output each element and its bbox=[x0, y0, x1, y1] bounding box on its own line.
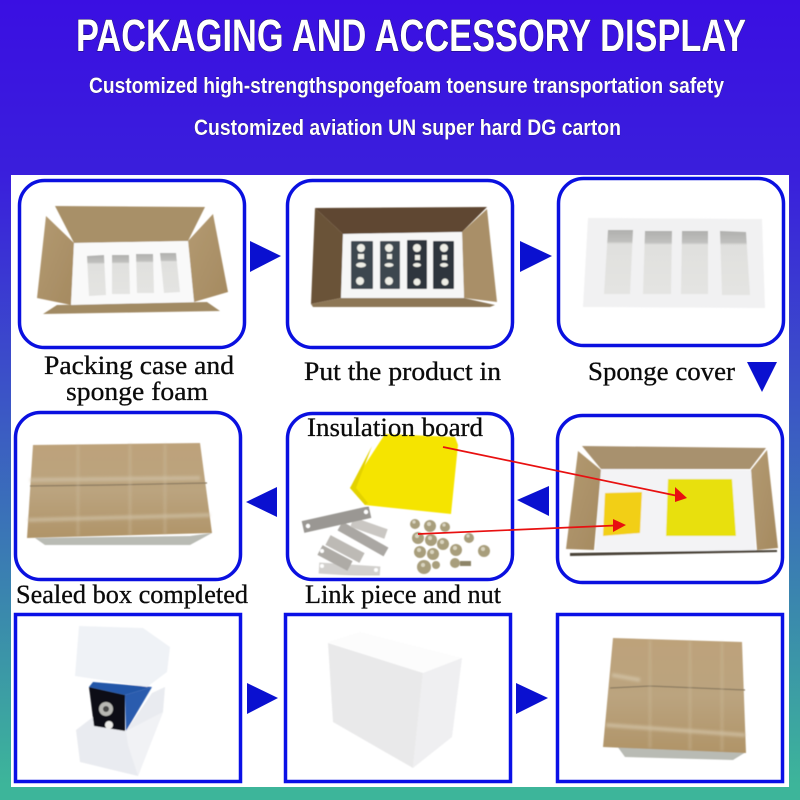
white content panel bbox=[11, 175, 789, 787]
panel: put the product in bbox=[288, 180, 512, 348]
arrow: red pointer to small board bbox=[418, 519, 626, 534]
arrow: right 1 bbox=[250, 241, 281, 272]
photo: taped carton bbox=[603, 638, 746, 760]
photo: insulation boards bbox=[350, 434, 458, 514]
panel: carton with boards bbox=[558, 416, 782, 582]
subtitle line 1: Customized high-strengthspongefoam toensure transportation safety bbox=[89, 73, 725, 98]
photo: metal link pieces bbox=[303, 510, 386, 572]
photo: carton with insulation boards bbox=[566, 446, 778, 556]
caption: packing case and sponge foam: Packing case and bbox=[44, 351, 234, 380]
panel: sealed box completed bbox=[16, 412, 240, 580]
caption: put the product in: Put the product in bbox=[304, 357, 501, 386]
arrow: red pointer to large board bbox=[443, 447, 687, 502]
photo: foam cover bbox=[583, 218, 765, 308]
photo: screws and nuts bbox=[410, 519, 490, 574]
subtitle line 2: Customized aviation UN super hard DG carton bbox=[194, 115, 621, 140]
panel: packing case and sponge foam bbox=[20, 180, 244, 348]
photo: cells in carton bbox=[311, 207, 497, 307]
caption: link piece and nut: Link piece and nut bbox=[305, 580, 502, 609]
arrow: right 2 bbox=[520, 241, 552, 272]
caption: sealed box completed: Sealed box completed bbox=[16, 580, 248, 609]
arrow: down bbox=[747, 362, 777, 392]
photo: foam block bbox=[328, 632, 462, 768]
photo: sealed carton bbox=[27, 443, 212, 545]
photo: open carton with foam bbox=[37, 206, 228, 314]
panel: cell in foam bbox=[16, 614, 240, 782]
arrow: left 1 bbox=[246, 487, 277, 517]
arrow: right 3 bbox=[247, 683, 278, 714]
caption: packing case and sponge foam: sponge foam bbox=[66, 377, 208, 406]
arrow: right 4 bbox=[516, 683, 548, 714]
caption: insulation board: Insulation board bbox=[307, 413, 483, 442]
caption: packing case and sponge foam bbox=[44, 351, 234, 406]
panel: foam wrapped cell bbox=[286, 614, 510, 782]
panel: sponge cover bbox=[558, 178, 784, 346]
panel: link piece and nut bbox=[288, 414, 512, 580]
photo: cell between foam blocks bbox=[75, 626, 170, 776]
panel: finished carton bbox=[558, 614, 782, 782]
caption: sponge cover: Sponge cover bbox=[588, 357, 735, 386]
arrow: left 2 bbox=[517, 486, 549, 516]
